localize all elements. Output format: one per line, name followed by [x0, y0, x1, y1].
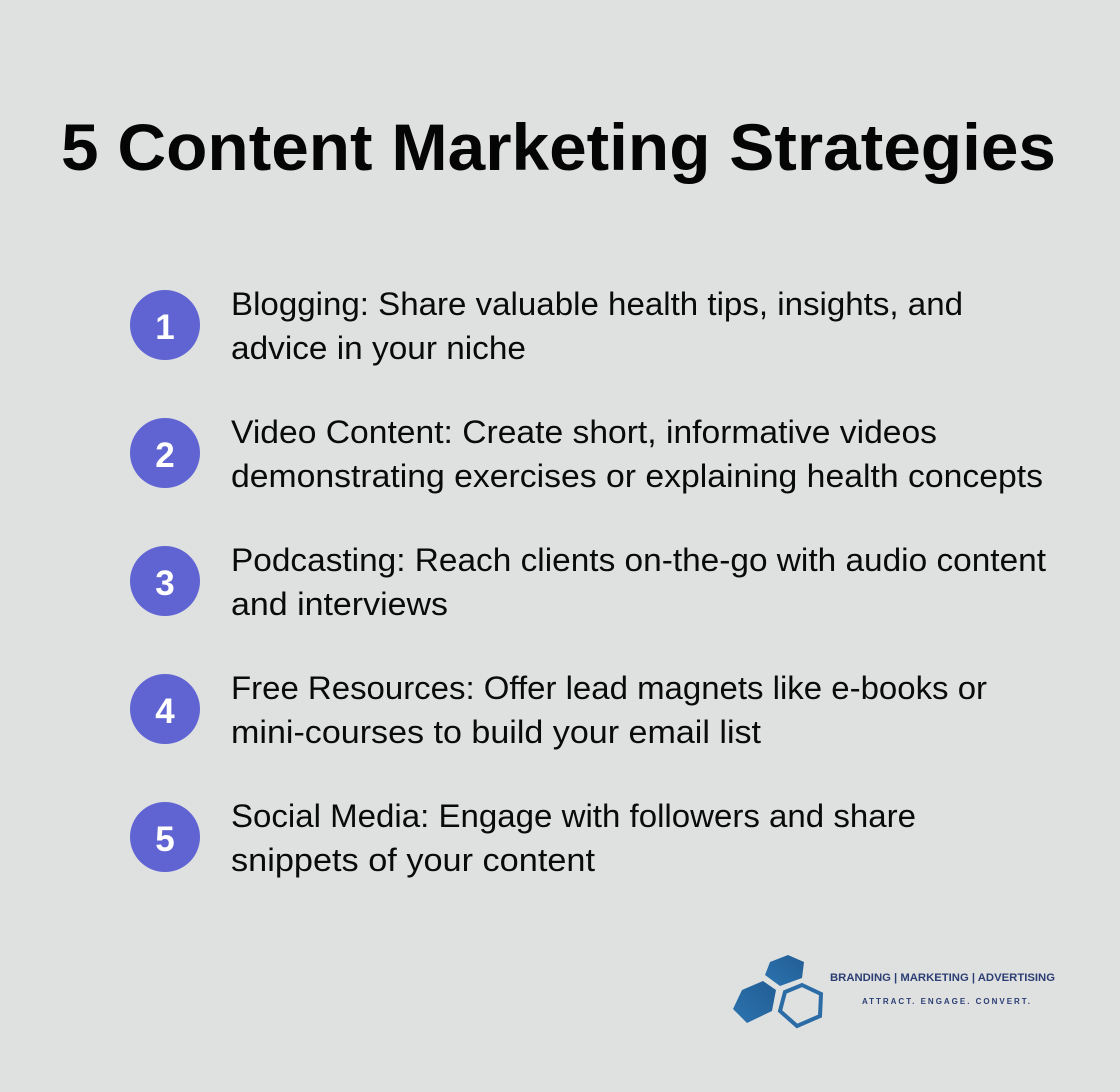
title: 5 Content Marketing Strategies [61, 110, 1056, 184]
tagline [830, 972, 1055, 1006]
badge 5 [130, 802, 200, 872]
text 2 [231, 414, 1043, 494]
list item 2 [130, 414, 1043, 494]
list item 4 [130, 670, 987, 750]
text 3: Podcasting: Reach clients on-the-go with audio content [231, 542, 1046, 578]
text 4 [231, 670, 987, 750]
text 1 [231, 286, 963, 366]
badge 3: 3 [155, 564, 175, 603]
text 5: snippets of your content [231, 842, 595, 878]
icon: hexagons [733, 955, 821, 1026]
logo [733, 955, 1055, 1026]
text 2: demonstrating exercises or explaining health concepts [231, 458, 1043, 494]
text 3: and interviews [231, 586, 448, 622]
badge 1: 1 [155, 308, 175, 347]
text 2: Video Content: Create short, informative videos [231, 414, 937, 450]
text 5: Social Media: Engage with followers and share [231, 798, 916, 834]
text 4: Free Resources: Offer lead magnets like e-books or [231, 670, 987, 706]
list item 3 [130, 542, 1046, 622]
badge 3 [130, 546, 200, 616]
text 1: advice in your niche [231, 330, 526, 366]
badge 2 [130, 418, 200, 488]
list item 5 [130, 798, 916, 878]
badge 4 [130, 674, 200, 744]
tagline: BRANDING | MARKETING | ADVERTISING [830, 972, 1055, 984]
text 4: mini-courses to build your email list [231, 714, 761, 750]
list item 1 [130, 286, 963, 366]
badge 5: 5 [155, 820, 175, 859]
text 1: Blogging: Share valuable health tips, insights, and [231, 286, 963, 322]
badge 1 [130, 290, 200, 360]
text 3 [231, 542, 1046, 622]
badge 2: 2 [155, 436, 175, 475]
badge 4: 4 [155, 692, 175, 731]
tagline: ATTRACT. ENGAGE. CONVERT. [862, 997, 1030, 1006]
text 5 [231, 798, 916, 878]
